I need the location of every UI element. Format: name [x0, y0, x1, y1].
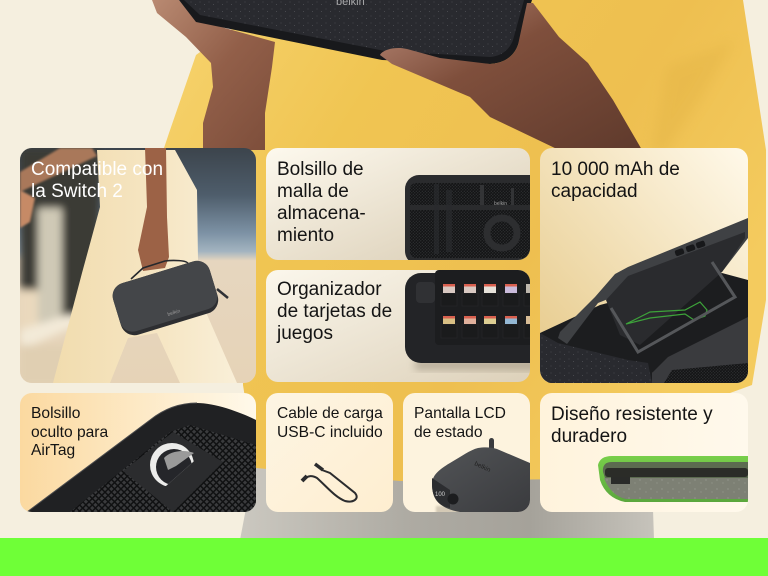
case interior [540, 273, 748, 383]
mesh [70, 425, 256, 512]
cable [302, 464, 357, 502]
sleeve seam shading [652, 40, 735, 160]
walking arm and hand [138, 148, 169, 271]
panel: diseño resistente: duradero [551, 426, 627, 447]
panel: compatible con la Switch 2 [20, 148, 256, 385]
title: Bolsillo [31, 405, 81, 422]
grey trousers [240, 466, 654, 540]
panel: bolsillo para AirTag: oculto para [31, 424, 108, 441]
case side view [598, 456, 748, 502]
game cards row 2 [443, 316, 530, 324]
left arm [20, 148, 97, 192]
title: Diseño resistente y [551, 404, 713, 425]
bag logo: belkin [167, 308, 181, 318]
background photo: person holding case [152, 0, 766, 540]
panel: pantalla LCD: de estado [414, 424, 483, 441]
panel: cable USB-C [266, 393, 393, 512]
panel: cable USB-C: USB-C incluido [277, 424, 383, 441]
mesh pocket [664, 363, 748, 383]
panel: 10 000 mAh [540, 148, 748, 383]
power bank [432, 438, 530, 512]
zipper tag [217, 289, 228, 298]
panel: organizador de tarjetas: juegos [276, 323, 333, 344]
device shadow [436, 506, 506, 514]
panel: organizador de tarjetas [266, 270, 555, 382]
title: 10 000 mAh de [551, 159, 680, 180]
panel: bolsillo de malla: miento [277, 225, 334, 246]
grey carrying bag [112, 261, 218, 336]
console buttons [674, 240, 706, 256]
case corner [27, 403, 256, 512]
panel: bolsillo de malla: almacena- [277, 203, 366, 224]
case lid [652, 317, 748, 383]
panel: diseño resistente [540, 393, 748, 512]
console body [558, 218, 748, 344]
AirTag [150, 443, 194, 487]
mesh pocket case [405, 175, 530, 260]
pockets [441, 293, 540, 338]
AirTag sleeve [123, 432, 223, 512]
carrying case held in hands [179, 0, 532, 64]
mesh pocket case: belkin [494, 201, 507, 207]
title: Organizador [277, 279, 382, 300]
panel: bolsillo para AirTag [20, 393, 256, 512]
panel: bolsillo para AirTag: AirTag [31, 442, 75, 459]
open case with game card organiser [405, 270, 530, 363]
cream trousers [53, 150, 237, 383]
panel: pantalla LCD [403, 393, 530, 514]
case shadow [415, 360, 545, 370]
title: Pantalla LCD [414, 405, 506, 422]
title: Compatible con [31, 159, 163, 180]
power bank: belkin [473, 460, 492, 474]
panel: bolsillo de malla: malla de [277, 181, 349, 202]
title: Cable de carga [277, 405, 383, 422]
left hand and arm [152, 0, 275, 150]
title: Bolsillo de [277, 159, 364, 180]
green battery outline [626, 302, 707, 324]
bag handle [131, 260, 188, 279]
panel: compatible con la Switch 2: la Switch 2 [31, 181, 123, 202]
right hand and thumb [380, 3, 642, 150]
green footer band [0, 538, 768, 576]
game cards row 1 [443, 284, 530, 293]
case outer wall [540, 333, 652, 383]
panel: 10 000 mAh: capacidad [551, 181, 638, 202]
panel: organizador de tarjetas: de tarjetas de [277, 301, 392, 322]
blurred street background [20, 148, 100, 385]
yellow shirt [160, 0, 766, 481]
power bank: 100 [435, 492, 446, 498]
kickstand [611, 262, 735, 352]
panel: bolsillo de malla [266, 148, 530, 260]
